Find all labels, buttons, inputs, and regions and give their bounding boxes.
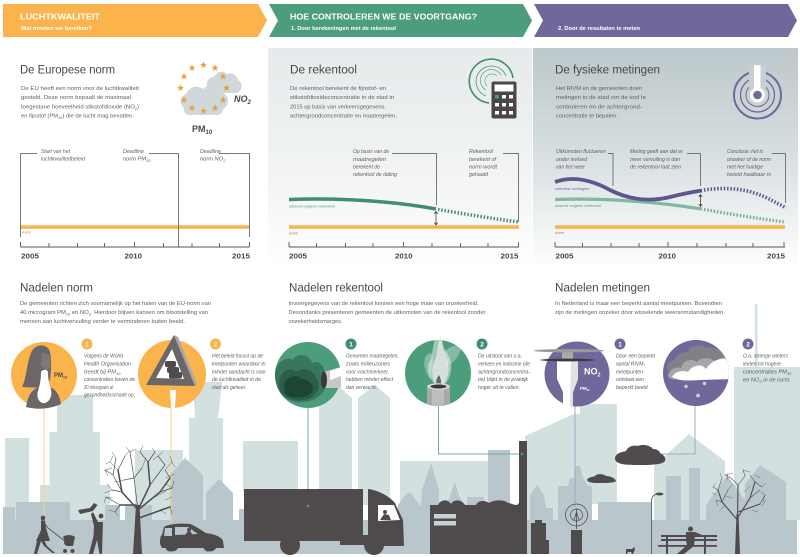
chart: metingen versus rekentool: 2015 bbox=[767, 252, 785, 260]
park bench with person bbox=[658, 526, 717, 554]
chart: Europese norm timeline: Start van het bbox=[41, 149, 70, 155]
callout text: uitstoot: achtergrondconcentra- bbox=[478, 370, 530, 376]
callout text: WHO: concentraties boven de bbox=[84, 377, 135, 383]
numbered badges: 1 bbox=[85, 342, 89, 348]
panel: de rekentool: De rekentool bbox=[290, 62, 357, 76]
panel: de fysieke metingen: De fysieke metingen bbox=[555, 62, 660, 76]
heading and text: nadelen rekentool: Nadelen rekentool bbox=[289, 280, 383, 294]
chart: rekentool projection: berekent de bbox=[353, 164, 380, 170]
chart: rekentool projection: norm bbox=[289, 230, 299, 236]
callout text: maatregelen: hebben minder effect bbox=[346, 377, 393, 383]
factory with chimney bbox=[430, 441, 527, 554]
chart: rekentool projection: 2015 bbox=[500, 252, 518, 260]
callout text: knelpunten: knelpunten waardoor er bbox=[212, 362, 267, 368]
icon: measuring station NO2 bbox=[534, 342, 610, 406]
header arrow: metingen: 2. Door de resultaten te meten bbox=[558, 26, 640, 32]
chart: metingen versus rekentool: uitkomst metingen bbox=[555, 186, 590, 191]
callout text: meetpunten: aantal RIVM- bbox=[616, 362, 645, 368]
icon: measuring station NO2: NO bbox=[584, 366, 598, 376]
city skyline: light buildings bbox=[5, 304, 800, 525]
figure: parent lifting child bbox=[78, 503, 103, 554]
callout text: uitstoot: tie) blijkt in de praktijk bbox=[478, 377, 529, 383]
icon: woman breathing fine dust: 10 bbox=[63, 376, 67, 380]
lamp head bbox=[656, 492, 664, 496]
chart: Europese norm timeline: 2015 bbox=[232, 252, 250, 260]
callout text: winters: O.a. strenge winters bbox=[743, 354, 788, 360]
chart: Europese norm timeline: norm PM bbox=[123, 156, 146, 162]
chart: Europese norm timeline: 10 bbox=[146, 158, 151, 163]
heading and text: nadelen rekentool bbox=[288, 280, 486, 325]
tree: left bbox=[104, 446, 175, 554]
callout text: meetpunten: meetpunten bbox=[616, 370, 643, 376]
panel: de Europese norm: en fijnstof (PM bbox=[21, 114, 59, 120]
numbered badges bbox=[82, 338, 754, 350]
dog bbox=[626, 547, 635, 554]
connector dot: factory bbox=[521, 453, 523, 455]
icon: woman breathing fine dust: PM bbox=[54, 373, 63, 379]
numbered badges: 1 bbox=[618, 342, 622, 348]
heading and text: nadelen metingen: zijn de metingen onzeker door wisselende weersomstandigheden. bbox=[555, 310, 725, 316]
callout text: meetpunten: ontstaat een bbox=[616, 377, 644, 383]
chart: metingen versus rekentool: meer vervuiling is dan bbox=[630, 157, 680, 163]
header arrow: luchtkwaliteit: Wat moeten we bereiken? bbox=[21, 26, 92, 32]
cloud: large dark bbox=[615, 445, 665, 465]
callout text: maatregelen: Genomen maatregelen, bbox=[346, 354, 399, 360]
chart: Europese norm timeline: 2005 bbox=[21, 252, 39, 260]
heading and text: nadelen rekentool: Invoergegevens van de rekentool kennen een hoge mate van onzekerheid. bbox=[288, 301, 479, 307]
chart: metingen versus rekentool: norm bbox=[555, 230, 565, 235]
chart: metingen versus rekentool: uitstoot volgens rekentool bbox=[555, 203, 601, 208]
icon: traffic jam warning sign bbox=[138, 335, 206, 409]
chart: metingen versus rekentool: beleid haalbaar is bbox=[727, 172, 771, 178]
chart: Europese norm timeline: 2 bbox=[222, 158, 226, 163]
chart: metingen versus rekentool: onzeker of de norm bbox=[727, 157, 771, 163]
panel: de rekentool: De rekentool berekent de fijnstof- en bbox=[290, 86, 386, 92]
chart: metingen versus rekentool: met het huidige bbox=[727, 164, 763, 170]
panel: de fysieke metingen: controleren en de achtergrond- bbox=[556, 104, 642, 110]
panel: de fysieke metingen: concentratie te bepalen. bbox=[556, 114, 618, 120]
icon: measuring station NO2: 2 bbox=[598, 372, 601, 378]
callout text: maatregelen: voor vrachtverkeer, bbox=[346, 370, 389, 376]
heading and text: nadelen norm bbox=[20, 280, 211, 325]
callout text: winters bbox=[743, 354, 792, 384]
callout text: winters: en NO bbox=[743, 378, 759, 384]
chart: Europese norm timeline: Deadline bbox=[123, 149, 144, 155]
chart: Europese norm timeline: Deadline bbox=[200, 149, 221, 155]
heading and text: nadelen rekentool: Desondanks presenteren gemeenten de uitkomsten van de rekentool zonder bbox=[288, 310, 486, 316]
chart: rekentool projection: 2010 bbox=[395, 252, 412, 260]
callout text: meetpunten: Door een beperkt bbox=[616, 354, 655, 360]
callout text: WHO bbox=[83, 354, 135, 398]
chart: metingen versus rekentool: 2010 bbox=[658, 252, 676, 260]
icon: calculator with signal arcs bbox=[469, 59, 516, 118]
chart: metingen versus rekentool: 2005 bbox=[556, 252, 574, 260]
tree: right bbox=[712, 470, 766, 554]
heading and text: nadelen norm: Nadelen norm bbox=[20, 280, 93, 294]
street lamp bbox=[652, 494, 658, 554]
heading and text: nadelen norm: De gemeenten richten zich voornamelijk op het halen van de EU-norm van bbox=[20, 301, 211, 307]
panel: de rekentool: stikstofdioxideconcentratie in de stad in bbox=[290, 95, 394, 101]
callout text: WHO: 20 microgram al bbox=[83, 385, 114, 391]
icon: EU stars and clouds: PM bbox=[192, 124, 206, 134]
callout text: meetpunten: beperkt beeld. bbox=[616, 385, 649, 391]
heading and text: nadelen norm: 40 microgram PM bbox=[20, 310, 66, 316]
callout text: winters: 10 bbox=[787, 371, 792, 376]
icon: EU stars and clouds: 2 bbox=[246, 100, 252, 106]
panel: de fysieke metingen: metingen in de stad om de tool te bbox=[556, 95, 647, 101]
numbered badges: 2 bbox=[746, 342, 750, 348]
panel: de Europese norm: ) bbox=[137, 104, 139, 110]
callout text: maatregelen: dan verwacht. bbox=[346, 385, 377, 391]
header arrow: hoe controleren we de voortgang: 1. Door berekeningen met de rekentool bbox=[291, 26, 397, 32]
cloud: small dark bbox=[587, 474, 616, 483]
callout text: WHO: Volgens de World bbox=[84, 354, 124, 360]
callout text: knelpunten: stad als geheel. bbox=[212, 385, 246, 391]
panel: de Europese norm: 10 bbox=[58, 115, 63, 120]
header arrow: luchtkwaliteit bbox=[3, 4, 267, 37]
chart: rekentool projection: maatregelen bbox=[353, 157, 386, 163]
callout text: WHO: 10 bbox=[116, 371, 121, 376]
chart: rekentool projection: berekent of bbox=[469, 157, 497, 163]
city skyline: darker buildings and ground bbox=[3, 450, 797, 554]
truck bbox=[244, 489, 404, 555]
panel: de fysieke metingen bbox=[555, 62, 660, 120]
chart: rekentool projection bbox=[289, 149, 519, 260]
callout text: knelpunten: de luchtkwaliteit in de bbox=[212, 377, 261, 383]
heading and text: nadelen norm: mensen aan luchtvervuiling verder te verminderen buiten beeld. bbox=[20, 319, 185, 325]
chart: Europese norm timeline: norm NO bbox=[200, 156, 223, 162]
panel: de Europese norm: De Europese norm bbox=[20, 62, 115, 76]
header arrow: hoe controleren we de voortgang bbox=[269, 4, 532, 37]
chart: rekentool projection: gehaald bbox=[469, 172, 489, 178]
callout text: knelpunten: Het beleid focust op de bbox=[212, 354, 263, 360]
chart: rekentool projection: uitstoot volgens rekentool bbox=[289, 204, 335, 208]
panel background: metingen bbox=[533, 48, 798, 270]
chart: metingen versus rekentool: Uitkomsten fluctueren bbox=[556, 149, 606, 155]
chart: metingen versus rekentool: Meting geeft aan dat er bbox=[630, 149, 684, 155]
icon: measuring station NO2: PM bbox=[580, 386, 587, 391]
chart: metingen versus rekentool: de rekentool laat zien bbox=[630, 164, 681, 170]
callout text: knelpunten: minder aandacht is voor bbox=[212, 370, 267, 376]
chart: Europese norm timeline: norm bbox=[22, 230, 32, 234]
heading and text: nadelen norm: en NO bbox=[70, 310, 89, 316]
chart: Europese norm timeline bbox=[20, 149, 250, 260]
heading and text: nadelen norm: . Hierdoor blijven kansen om blootstelling van bbox=[91, 310, 208, 316]
callout text: knelpunten bbox=[212, 354, 267, 391]
heading and text: nadelen metingen: In Nederland is maar een beperkt aantal meetpunten. Bovendien bbox=[555, 301, 722, 307]
icon: EU stars and clouds: NO bbox=[234, 94, 248, 104]
heading and text: nadelen metingen: Nadelen metingen bbox=[555, 280, 650, 294]
icon: smoke against milieuzone bbox=[275, 342, 341, 408]
icon: measuring power symbol bbox=[734, 65, 781, 118]
panel: de Europese norm: gesteld. Deze norm bepaalt de maximaal bbox=[21, 95, 131, 101]
heading and text: nadelen norm: 2 bbox=[89, 312, 92, 316]
panel: de rekentool bbox=[290, 62, 397, 120]
chart: metingen versus rekentool: onder invloed bbox=[556, 157, 588, 163]
callout text: winters: 2 bbox=[758, 379, 762, 384]
chart: metingen versus rekentool: Conclusie: het is bbox=[727, 149, 763, 155]
callout text: WHO: gezondheidsschade op. bbox=[84, 392, 135, 398]
callout text: winters: in de lucht. bbox=[762, 378, 791, 384]
header arrow: hoe controleren we de voortgang: HOE CONTROLEREN WE DE VOORTGANG? bbox=[290, 12, 477, 22]
header arrow: metingen bbox=[534, 4, 797, 37]
panel: de rekentool: 2015 op basis van verkeersgegevens, bbox=[290, 104, 386, 110]
callout text: winters: concentraties PM bbox=[743, 370, 787, 376]
icon: chimney with smoke bbox=[405, 321, 471, 406]
callout text: winters: leiden tot hogere bbox=[743, 362, 781, 368]
heading and text: nadelen norm: 10 bbox=[66, 312, 71, 316]
panel: de fysieke metingen: Het RIVM en de gemeenten doen bbox=[556, 86, 642, 92]
callout text: uitstoot: hoger uit te vallen. bbox=[478, 385, 520, 391]
icon: measuring station NO2: 10 bbox=[587, 389, 590, 392]
numbered badges: 2 bbox=[480, 342, 484, 348]
panel: de Europese norm bbox=[20, 62, 139, 120]
car bbox=[160, 524, 224, 552]
icon: winter clouds with snow bbox=[663, 340, 732, 406]
header arrow: luchtkwaliteit: LUCHTKWALITEIT bbox=[20, 12, 101, 22]
dark buildings beside the antenna bbox=[531, 520, 549, 554]
panel: de Europese norm: ) die de lucht mag bevatten. bbox=[62, 114, 134, 120]
panel: de rekentool: achtergrondconcentratie en maatregelen. bbox=[290, 114, 397, 120]
connector lines from circles to city bbox=[44, 403, 695, 524]
chart: metingen versus rekentool: van het weer bbox=[556, 164, 586, 170]
callout text: maatregelen: zoals milieuzones bbox=[345, 362, 390, 368]
chart: rekentool projection: Op basis van de bbox=[353, 149, 389, 155]
panel: de Europese norm: 2 bbox=[135, 106, 138, 111]
heading and text: nadelen rekentool: onzekerheidsmarges. bbox=[288, 319, 343, 325]
figure: woman with stroller bbox=[34, 516, 75, 554]
connector dot: truck bbox=[307, 505, 309, 507]
chart: Europese norm timeline: 2010 bbox=[124, 252, 142, 260]
icon: EU stars and clouds bbox=[177, 61, 252, 136]
callout text: maatregelen bbox=[345, 354, 399, 391]
numbered badges: 2 bbox=[214, 342, 218, 348]
chart: rekentool projection: norm wordt bbox=[469, 164, 497, 170]
connector dot: cloud bbox=[639, 453, 641, 455]
panel background: rekentool bbox=[268, 48, 532, 270]
callout text: uitstoot bbox=[478, 354, 530, 391]
heading and text: nadelen metingen bbox=[555, 280, 725, 316]
panel: de Europese norm: toegestane hoeveelheid stikstofdioxide (NO bbox=[21, 104, 135, 110]
chart: Europese norm timeline: luchtkwaliteitbeleid bbox=[41, 156, 86, 162]
callout text: uitstoot: verkeer en industrie (de bbox=[478, 362, 530, 368]
chart: rekentool projection: 2005 bbox=[289, 252, 307, 260]
panel: de Europese norm: De EU heeft een norm voor de luchtkwaliteit bbox=[21, 86, 139, 92]
chart: metingen versus rekentool bbox=[555, 149, 786, 260]
icon: woman breathing fine dust bbox=[11, 342, 77, 409]
chart: rekentool projection: rekentool de daling bbox=[353, 172, 398, 178]
callout text: uitstoot: De uitstoot van o.a. bbox=[478, 354, 522, 360]
icon: antenna mast bbox=[566, 504, 588, 554]
callout text: WHO: Health Organisation bbox=[84, 362, 131, 368]
chart: rekentool projection: Rekentool bbox=[469, 149, 494, 155]
numbered badges: 1 bbox=[349, 342, 353, 348]
callout text: meetpunten bbox=[616, 354, 655, 391]
icon: EU stars and clouds: 10 bbox=[206, 130, 213, 136]
callout text: WHO: treedt bij PM bbox=[84, 370, 116, 376]
